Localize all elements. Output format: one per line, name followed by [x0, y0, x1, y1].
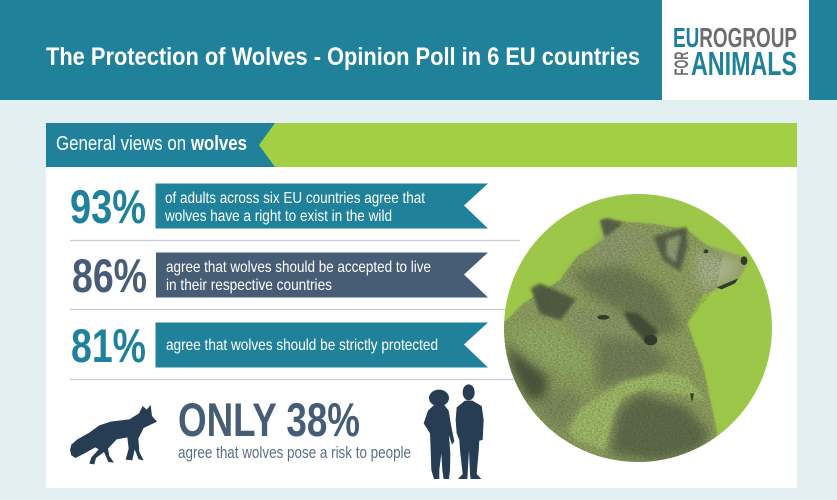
header band — [0, 0, 837, 100]
photo: two wolves in green duotone — [500, 194, 772, 467]
stat row: 81% — [71, 319, 488, 372]
ribbon: 86% — [156, 252, 488, 298]
stat row: 93% — [70, 180, 488, 233]
logo: Eurogroup for Animals: FOR — [672, 51, 693, 76]
stat row: 86%: 86% — [72, 249, 147, 302]
section heading text: General views on wolves — [56, 133, 247, 155]
icon: wolf silhouette — [70, 405, 157, 464]
stat row: 86% — [72, 249, 488, 302]
ribbon: 93% — [156, 184, 488, 228]
logo: Eurogroup for Animals — [662, 0, 809, 100]
ribbon: 93%: wolves have a right to exist in the wild — [164, 208, 392, 225]
facial details — [597, 249, 747, 402]
fur grain — [500, 218, 723, 467]
title: The Protection of Wolves - Opinion Poll in 6 EU countries — [46, 43, 640, 71]
ribbon: 81% — [156, 322, 488, 368]
lighter paw and foreleg — [568, 373, 705, 450]
callout: only 38%: ONLY 38% — [178, 393, 360, 446]
ribbon: 86%: in their respective countries — [166, 277, 332, 294]
wolf bodies — [500, 218, 747, 467]
ribbon: 81%: agree that wolves should be strictly protected — [166, 337, 438, 354]
shading — [506, 230, 738, 462]
divider lines — [70, 240, 520, 380]
callout: only 38%: agree that wolves pose a risk to people — [178, 443, 411, 462]
ribbon: 86%: agree that wolves should be accepted to live — [166, 259, 431, 276]
ribbon: 93%: of adults across six EU countries agree that — [165, 190, 425, 207]
main panel — [46, 123, 797, 488]
section heading banner — [46, 123, 797, 167]
stat row: 81%: 81% — [71, 319, 146, 372]
dark ears — [531, 218, 687, 343]
stat row: 93%: 93% — [70, 180, 146, 233]
icon: two people silhouettes — [424, 384, 484, 479]
